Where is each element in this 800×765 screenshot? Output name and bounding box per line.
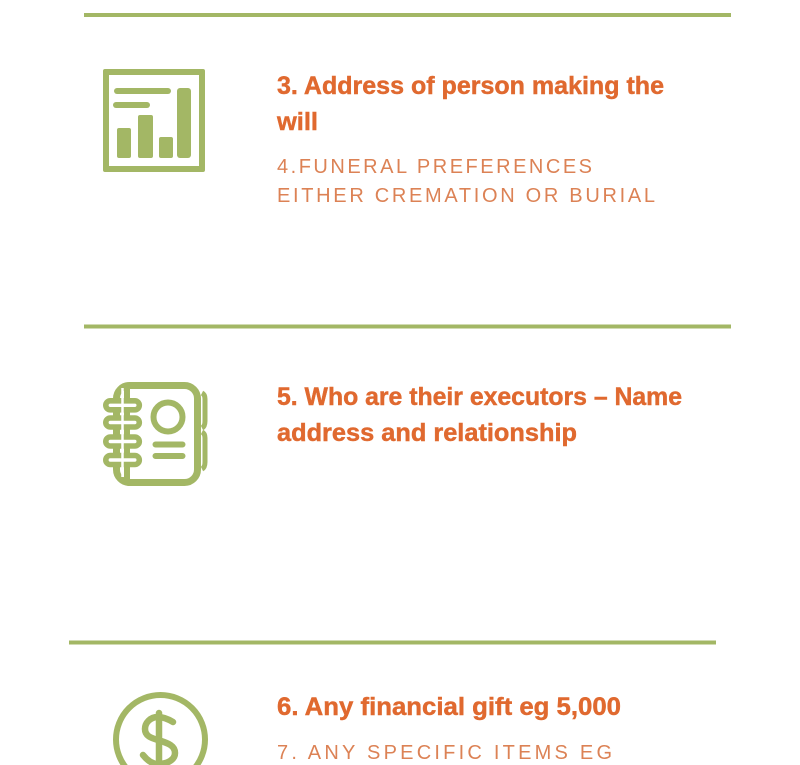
heading: item 5: 5. Who are their executors – Name bbox=[277, 383, 682, 411]
icon: bar chart report bbox=[103, 69, 205, 172]
heading: item 6: 6. Any financial gift eg 5,000 bbox=[277, 693, 621, 721]
heading: item 5 bbox=[277, 383, 682, 447]
heading: item 3 bbox=[276, 72, 664, 136]
text: item 4 funeral preferences bbox=[277, 156, 655, 207]
text: item 7 specific items: 7. ANY SPECIFIC ITEMS EG bbox=[277, 742, 612, 764]
heading: item 3: will bbox=[276, 108, 318, 136]
text: item 4 funeral preferences: EITHER CREMATION OR BURIAL bbox=[277, 185, 655, 207]
heading: item 3: 3. Address of person making the bbox=[277, 72, 664, 100]
heading: item 5: address and relationship bbox=[277, 419, 577, 447]
icon: address book bbox=[106, 385, 205, 483]
text: item 4 funeral preferences: 4.FUNERAL PREFERENCES bbox=[277, 156, 592, 178]
icon: dollar coin bbox=[116, 695, 205, 765]
